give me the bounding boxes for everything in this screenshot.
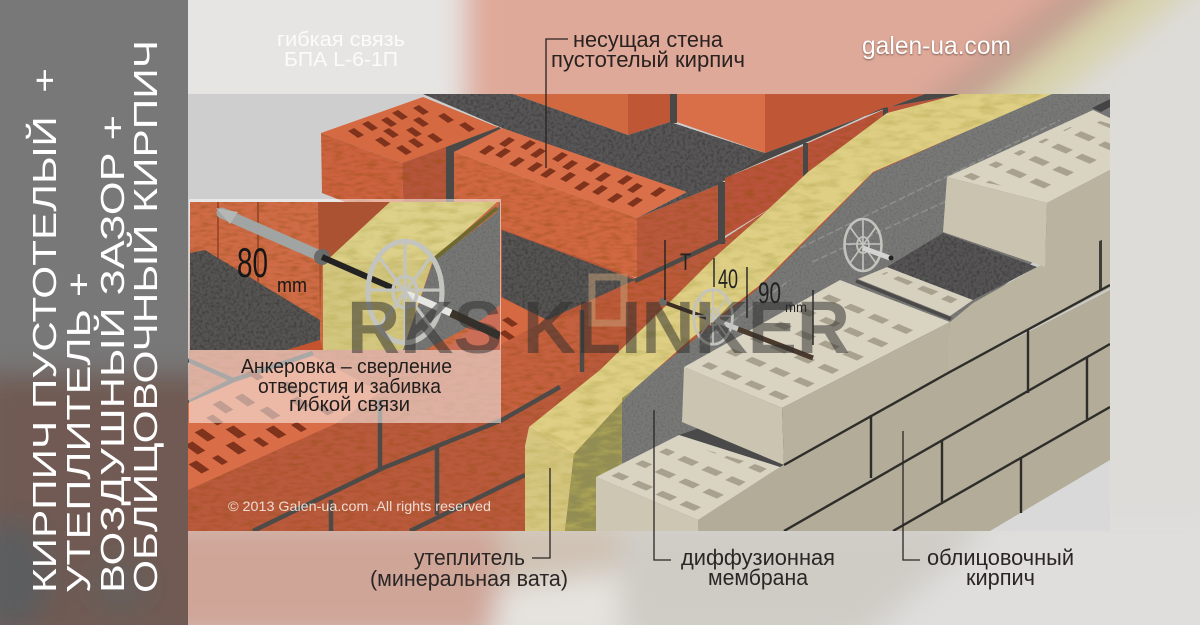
dimension annotations: Т	[680, 249, 691, 276]
label: insulation: (минеральная вата)	[370, 566, 568, 591]
membrane	[622, 94, 1110, 531]
sidebar title: УТЕПЛИТЕЛЬ +	[60, 272, 97, 593]
label: load-bearing wall: пустотелый кирпич	[551, 47, 745, 72]
label: facing brick	[903, 431, 1074, 590]
label: diffusion membrane: диффузионная	[681, 545, 835, 570]
facing brick wall	[596, 99, 1110, 531]
dark mortar slab 3	[887, 233, 1037, 300]
brick joints	[188, 239, 725, 531]
label: diffusion membrane: мембрана	[708, 565, 809, 590]
inset caption: Анкеровка – сверление	[241, 356, 452, 378]
inset caption	[241, 356, 452, 416]
hollow brick 4, lower left	[185, 356, 380, 490]
load-bearing hollow brick wall	[188, 94, 990, 531]
inset dimension: mm	[277, 275, 307, 297]
inset dimension: 80	[237, 239, 268, 286]
upper bricks	[513, 94, 628, 135]
floor	[990, 455, 1110, 531]
dimension annotations: 40	[718, 264, 738, 294]
anchor behind top brick	[844, 219, 894, 271]
mortar slab 2	[502, 230, 635, 320]
insulation (mineral wool)	[525, 94, 1052, 531]
anchor dowel	[216, 208, 500, 343]
label: load-bearing wall: несущая стена	[573, 27, 724, 52]
wall faces	[698, 290, 1110, 531]
dark mortar joint	[856, 281, 951, 319]
inset caption: отверстия и забивка	[258, 376, 442, 398]
main illustration	[185, 94, 1110, 531]
lower facing brick	[596, 435, 780, 531]
hollow brick 1	[321, 97, 498, 202]
dimension annotations: mm	[785, 299, 807, 315]
dimension annotations	[665, 240, 813, 345]
label: load-bearing wall	[546, 27, 745, 168]
second top brick	[858, 232, 1110, 373]
facing brick joints	[784, 285, 1110, 531]
hollow brick 3	[499, 297, 582, 420]
inset: anchoring detail	[189, 199, 501, 423]
label: facing brick: облицовочный	[927, 545, 1074, 570]
label: facing brick: кирпич	[966, 565, 1035, 590]
dark mortar slab	[423, 94, 765, 218]
mortar above upper course	[718, 94, 965, 185]
sidebar title: ВОЗДУШНЫЙ ЗАЗОР +	[94, 115, 131, 593]
copyright: © 2013 Galen-ua.com .All rights reserved	[228, 498, 491, 514]
sidebar panel	[0, 0, 188, 625]
inset caption: гибкой связи	[289, 394, 410, 416]
wall anchor in section	[659, 290, 813, 358]
big facing brick	[682, 280, 950, 465]
sidebar title	[26, 40, 164, 593]
dimension annotations: 90	[758, 277, 781, 310]
sidebar title: ОБЛИЦОВОЧНЫЙ КИРПИЧ	[127, 40, 164, 593]
label: insulation	[370, 468, 568, 591]
mortar under lower course	[679, 330, 950, 467]
watermark: RKS KLINKER	[347, 286, 850, 369]
inset photo	[190, 202, 500, 350]
sidebar title: КИРПИЧ ПУСТОТЕЛЫЙ +	[26, 68, 63, 593]
label: flexible tie: гибкая связь	[277, 29, 405, 51]
inset dimension	[238, 248, 306, 292]
label: flexible tie	[277, 29, 405, 71]
label: flexible tie: БПА L-6-1П	[284, 49, 398, 71]
label: insulation: утеплитель	[414, 545, 525, 570]
label: diffusion membrane	[654, 410, 835, 590]
site name: galen-ua.com	[862, 32, 1011, 60]
top facing brick	[943, 99, 1110, 267]
hollow brick 2	[454, 128, 718, 278]
